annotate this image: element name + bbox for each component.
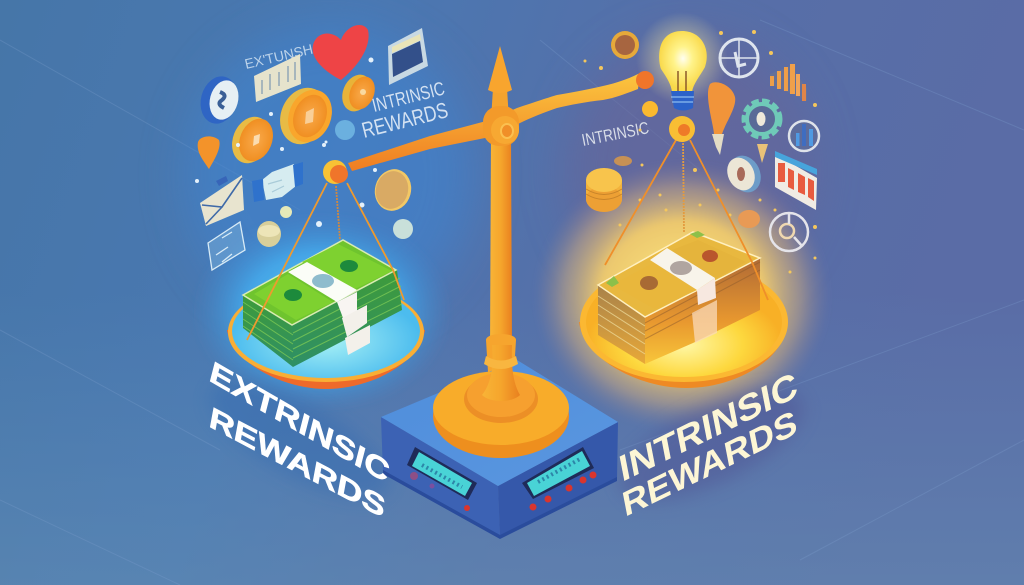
white cash band [288,262,357,302]
right floating icons: intrinsic [580,12,819,274]
icon: orange pin [198,136,220,169]
label: EXTUNSH: EX'TUNSH [243,41,314,72]
icon: round bar chart [789,121,819,151]
icon: gold ball [642,101,658,117]
gold cash stack [598,231,760,364]
label: INTRINSIC REWARDS small: INTRINSIC [370,79,447,117]
icon: orange bulb [708,82,735,155]
base lower rim [383,470,617,539]
icon: cream dial [722,150,767,198]
icon: stacked disc [257,221,281,247]
base unit [381,345,618,539]
icon: teal gear [745,102,779,163]
label: INTRINSIC small: INTRINSIC [580,118,651,150]
icon: handshake [252,162,303,202]
orange round foot [433,345,569,458]
icon: target ring [770,213,808,251]
icon: clock ring [720,38,758,78]
left pan dish [227,282,425,389]
green cash stack [243,240,402,367]
pole [490,135,512,350]
left joint [323,160,348,184]
icon: gold coin stack [586,168,622,212]
icon: medium coin [225,111,279,169]
right pan dish [579,262,788,388]
left pan with green cash [227,240,425,389]
heading: intrinsic rewards: REWARDS [619,403,800,525]
heading: extrinsic rewards: EXTRINSIC [206,356,393,490]
white gold band [650,248,715,290]
base left face [381,417,500,538]
icon: chart card [254,54,301,102]
base top [381,360,618,486]
heading: intrinsic rewards: INTRINSIC [616,363,801,490]
base right face [498,422,618,538]
icon: wireframe card [208,222,245,270]
sparkles left [195,58,377,227]
pole neck [491,88,509,120]
icon: round coin top [611,31,639,59]
collar [486,334,516,372]
right pan with gold cash [579,231,788,388]
right beam end [636,71,654,89]
beam [348,73,640,171]
icon: envelope [200,175,244,226]
icon: bar chart card [775,151,817,210]
label: INTRINSIC REWARDS small [359,79,451,143]
right display [522,447,594,499]
label: INTRINSIC REWARDS small: REWARDS [359,97,451,143]
icon: blue dollar badge [195,72,243,128]
icon: tan coin [370,165,416,215]
sparkles right [584,30,817,274]
icon: red heart [313,25,369,80]
icon: tablet card [388,28,428,85]
red buttons [410,472,596,511]
heading: intrinsic rewards [616,363,801,525]
left floating icons: extrinsic [195,25,451,270]
pivot [483,106,519,146]
icon: large coin [272,80,340,152]
icon: light bulb [636,12,728,110]
hanger cords right [605,140,768,300]
scale: beam, pole and hangers [247,46,768,372]
right joint [669,116,695,142]
pole tip [488,46,512,93]
icon: small cupcake [738,210,760,228]
heading: extrinsic rewards: REWARDS [207,401,388,525]
heading: extrinsic rewards [206,356,393,525]
icon: blue ball [335,120,355,140]
hanger cords left [247,183,404,340]
icon: small coin right [337,70,379,116]
left display [407,447,477,500]
icon: orange bar chart [770,64,807,101]
